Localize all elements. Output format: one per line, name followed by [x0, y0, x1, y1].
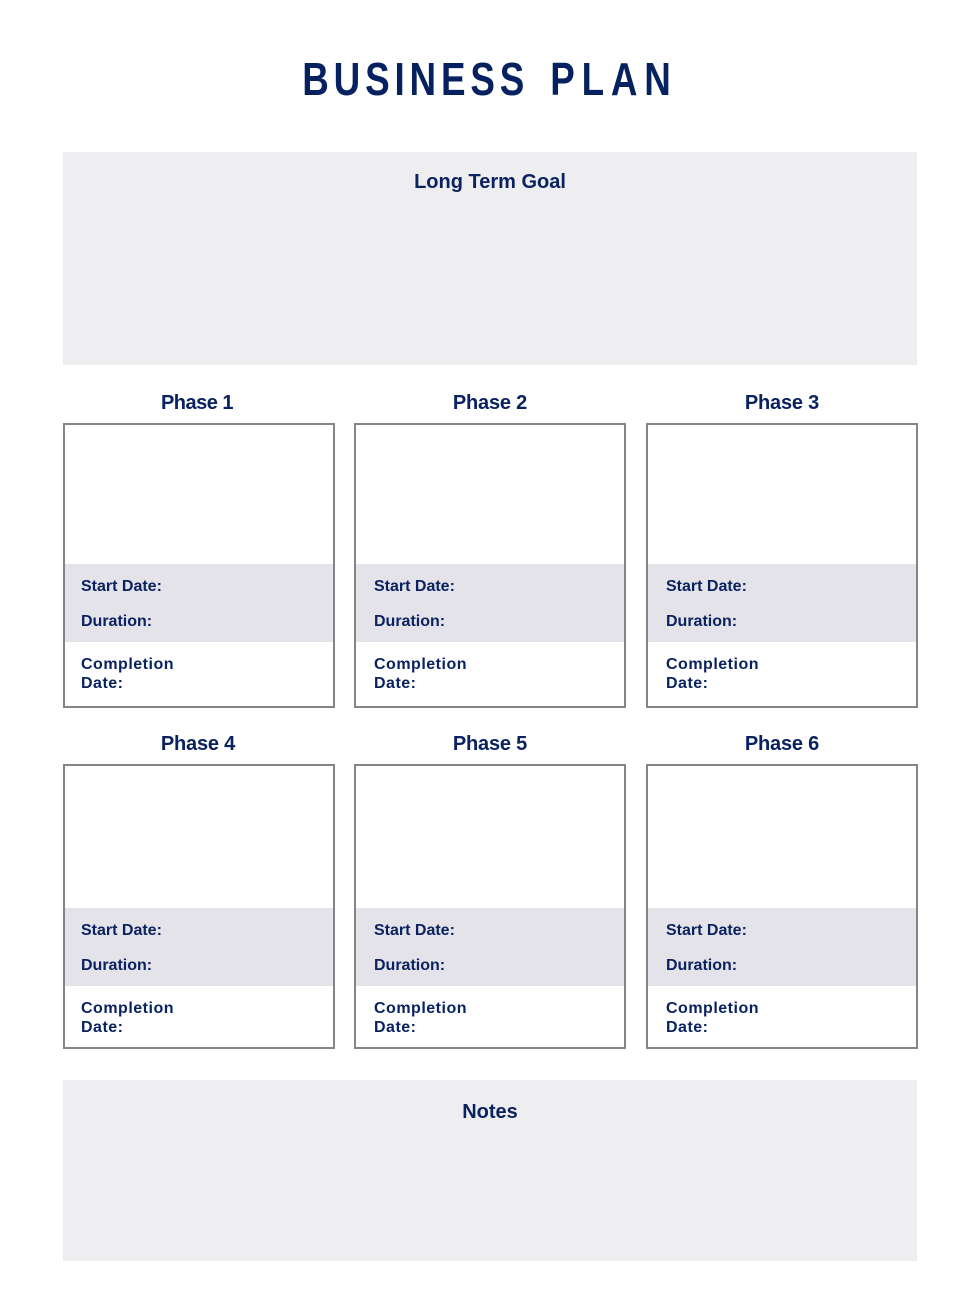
phase 2 completion date: Completion [374, 656, 467, 673]
phase 4 completion date [81, 1000, 174, 1036]
phase 5 duration: Duration: [374, 957, 445, 974]
phase 3 completion date: Date: [666, 675, 709, 692]
phase 1 start date: Start Date: [81, 578, 162, 595]
phase 3 completion date [666, 656, 759, 692]
phase 1 date band [65, 564, 332, 642]
phase 6 completion date: Date: [666, 1019, 709, 1036]
phase 1 completion date: Completion [81, 656, 174, 673]
phase 5 completion date: Completion [374, 1000, 467, 1017]
phase 6 duration: Duration: [666, 957, 737, 974]
phase 3 duration: Duration: [666, 613, 737, 630]
panel: long term goal [63, 152, 917, 365]
panel: phase 6 [646, 764, 918, 1049]
phase 3 date band [648, 564, 916, 642]
phase 6 completion date [666, 1000, 759, 1036]
panel: phase 1 [63, 423, 334, 708]
panel: phase 3 [646, 423, 918, 708]
phase 2 duration: Duration: [374, 613, 445, 630]
phase 6 start date: Start Date: [666, 922, 747, 939]
phase 5 start date: Start Date: [374, 922, 455, 939]
heading: phase 5: Phase 5 [453, 733, 527, 755]
phase 4 date band [65, 908, 332, 986]
phase 4 duration: Duration: [81, 957, 152, 974]
phase 5 completion date [374, 1000, 467, 1036]
panel: phase 5 [354, 764, 626, 1049]
phase 3 completion date: Completion [666, 656, 759, 673]
heading: long term goal: Long Term Goal [414, 171, 566, 193]
phase 2 date band [356, 564, 624, 642]
heading: notes: Notes [462, 1101, 518, 1123]
phase 1 completion date: Date: [81, 675, 124, 692]
phase 6 date band [648, 908, 916, 986]
phase 4 completion date: Completion [81, 1000, 174, 1017]
phase 2 completion date: Date: [374, 675, 417, 692]
phase 1 duration: Duration: [81, 613, 152, 630]
title: BUSINESS PLAN [302, 53, 678, 105]
phase 1 completion date [81, 656, 174, 692]
phase 4 start date: Start Date: [81, 922, 162, 939]
phase 6 completion date: Completion [666, 1000, 759, 1017]
panel: phase 4 [63, 764, 334, 1049]
heading: phase 6: Phase 6 [745, 733, 819, 755]
phase 2 start date: Start Date: [374, 578, 455, 595]
heading: phase 1: Phase 1 [161, 392, 233, 414]
heading: phase 4: Phase 4 [161, 733, 235, 755]
phase 3 start date: Start Date: [666, 578, 747, 595]
panel: notes [63, 1080, 917, 1261]
heading: phase 2: Phase 2 [453, 392, 527, 414]
phase 5 date band [356, 908, 624, 986]
phase 5 completion date: Date: [374, 1019, 417, 1036]
phase 2 completion date [374, 656, 467, 692]
heading: phase 3: Phase 3 [745, 392, 819, 414]
panel: phase 2 [354, 423, 626, 708]
phase 4 completion date: Date: [81, 1019, 124, 1036]
